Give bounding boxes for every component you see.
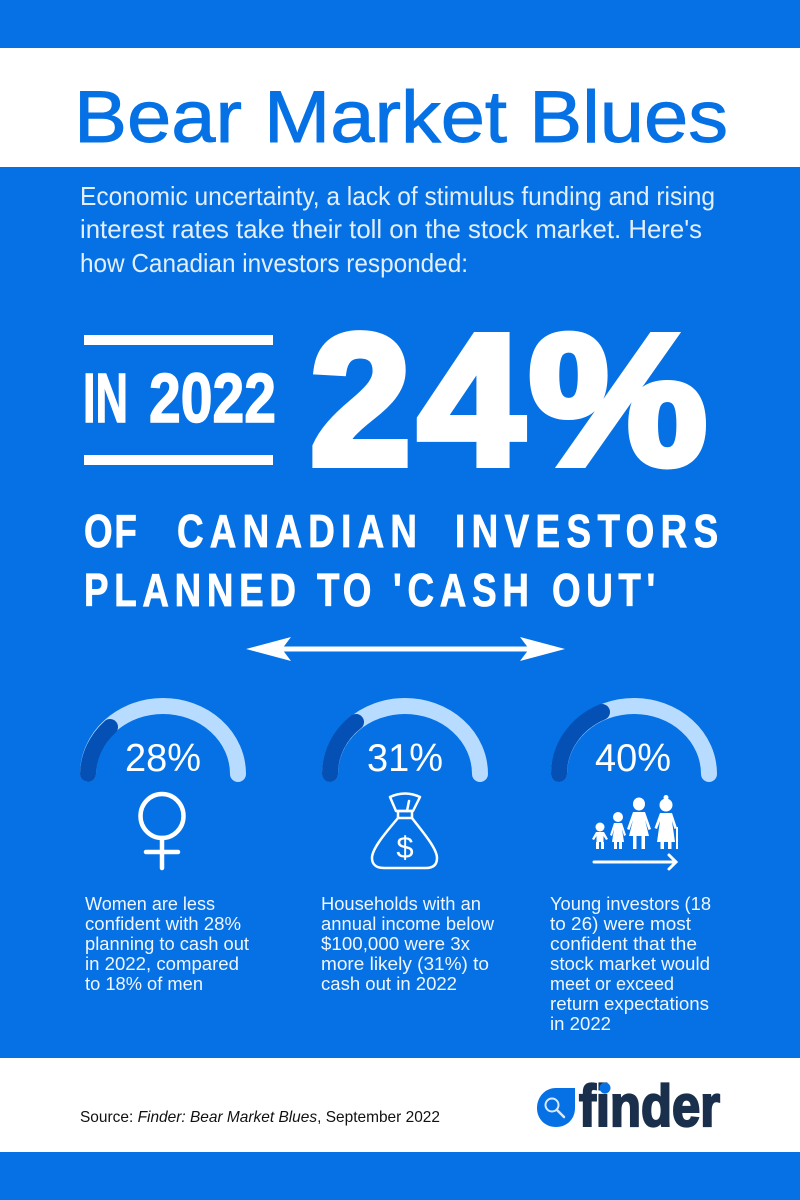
icon: money bag: $ <box>396 830 414 865</box>
big stat: 24%: 4 <box>418 297 524 504</box>
intro text: Economic uncertainty, a lack of stimulus funding and rising <box>80 181 715 211</box>
icon: people of increasing age with arrow <box>592 795 678 869</box>
gauge: 28%: 28% <box>125 737 201 780</box>
gauge: 31%: 31% <box>367 737 443 780</box>
title band <box>0 48 800 167</box>
gauge: 28% <box>88 706 238 780</box>
text: women stat: Women are less <box>85 894 215 914</box>
year label <box>83 335 276 465</box>
icon: female symbol <box>140 794 184 868</box>
gauge: 40% <box>559 706 709 780</box>
text: young investors stat: to 26) were most <box>550 914 691 934</box>
year label: 2022 <box>149 359 276 437</box>
text: young investors stat <box>550 894 711 1034</box>
text: young investors stat: return expectations <box>550 994 709 1014</box>
headline: PLANNED <box>84 564 296 616</box>
text: household income stat: $100,000 were 3x <box>321 934 470 954</box>
title: Bear Market Blues <box>74 77 728 158</box>
text: women stat: in 2022, compared <box>85 954 239 974</box>
text: women stat: planning to cash out <box>85 934 249 954</box>
year label: IN <box>83 359 128 437</box>
footer band <box>0 1058 800 1152</box>
big stat: 24%: % <box>529 297 707 504</box>
text: household income stat: Households with an <box>321 894 481 914</box>
big stat: 24% <box>310 297 707 504</box>
text: young investors stat: meet or exceed <box>550 974 674 994</box>
headline <box>84 505 718 616</box>
text: household income stat: cash out in 2022 <box>321 974 457 994</box>
gauge: 40%: 40% <box>595 737 671 780</box>
text: women stat: confident with 28% <box>85 914 241 934</box>
text: household income stat <box>321 894 495 994</box>
headline: INVESTORS <box>455 505 718 557</box>
logo: finder: finder <box>579 1074 720 1139</box>
text: household income stat: annual income below <box>321 914 495 934</box>
text: young investors stat: in 2022 <box>550 1014 611 1034</box>
intro text: interest rates take their toll on the stock market. Here's <box>80 214 702 244</box>
headline: OF <box>84 505 137 557</box>
headline: CANADIAN <box>177 505 417 557</box>
headline: OUT' <box>552 564 655 616</box>
text: young investors stat: Young investors (18 <box>550 894 711 914</box>
headline: 'CASH <box>393 564 529 616</box>
text: young investors stat: stock market would <box>550 954 710 974</box>
source text: Source: Finder: Bear Market Blues, September 2022 <box>80 1109 440 1126</box>
headline: TO <box>317 564 371 616</box>
intro text <box>80 181 715 278</box>
text: women stat: to 18% of men <box>85 974 203 994</box>
text: women stat <box>85 894 249 994</box>
logo: finder <box>537 1074 720 1139</box>
arrow: double-headed <box>246 637 565 661</box>
intro text: how Canadian investors responded: <box>80 248 468 278</box>
text: young investors stat: confident that the <box>550 934 697 954</box>
icon: money bag <box>372 794 437 868</box>
big stat: 24%: 2 <box>310 297 411 504</box>
gauge: 31% <box>330 706 480 780</box>
text: household income stat: more likely (31%) to <box>321 954 489 974</box>
